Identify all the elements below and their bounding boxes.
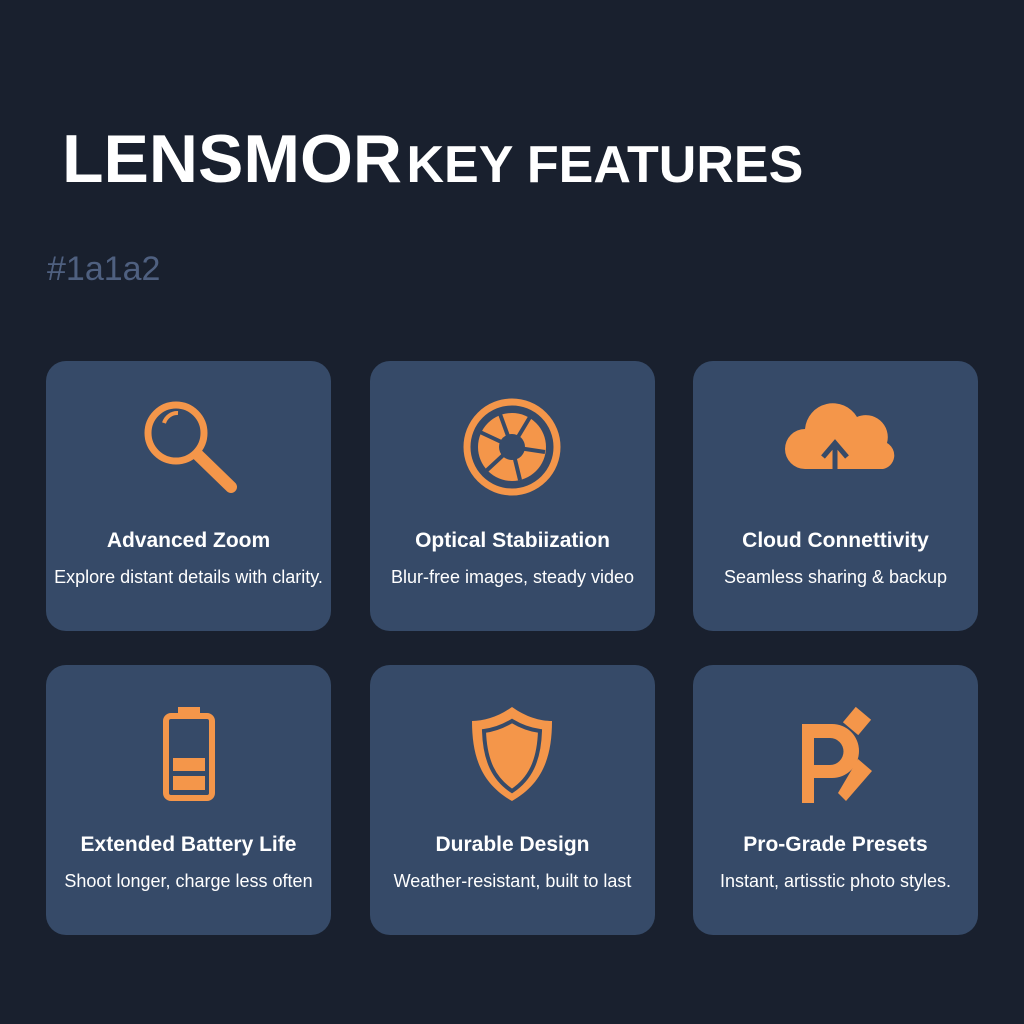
card: advanced zoom: Explore distant details with clarity.	[54, 567, 323, 587]
icon: cloud upload	[785, 403, 894, 469]
icon: aperture	[464, 398, 560, 496]
card: cloud: Cloud Connettivity	[742, 529, 929, 552]
icon: shield	[472, 707, 552, 801]
card: presets: Instant, artisstic photo styles.	[720, 871, 951, 891]
card: presets: Pro-Grade Presets	[743, 833, 928, 856]
title: LENSMOR KEY FEATURES	[62, 121, 803, 197]
icon: magnifier	[144, 402, 237, 493]
subtitle code: #1a1a2	[47, 250, 160, 288]
card: optical stabilization: Optical Stabiization	[415, 529, 610, 552]
card: battery	[46, 665, 331, 935]
icon: battery	[163, 707, 215, 801]
card: cloud	[693, 361, 978, 631]
card: battery: Extended Battery Life	[81, 833, 296, 856]
card: optical stabilization: Blur-free images, steady video	[391, 567, 634, 587]
card: presets	[693, 665, 978, 935]
icon: P brush	[802, 706, 872, 803]
card: durable: Durable Design	[435, 833, 590, 856]
card: battery: Shoot longer, charge less often	[64, 871, 313, 891]
card: cloud: Seamless sharing & backup	[724, 567, 947, 587]
card: optical stabilization	[370, 361, 655, 631]
card: durable	[370, 665, 655, 935]
card: durable: Weather-resistant, built to last	[394, 871, 631, 891]
card: advanced zoom: Advanced Zoom	[107, 529, 270, 552]
card: advanced zoom	[46, 361, 331, 631]
